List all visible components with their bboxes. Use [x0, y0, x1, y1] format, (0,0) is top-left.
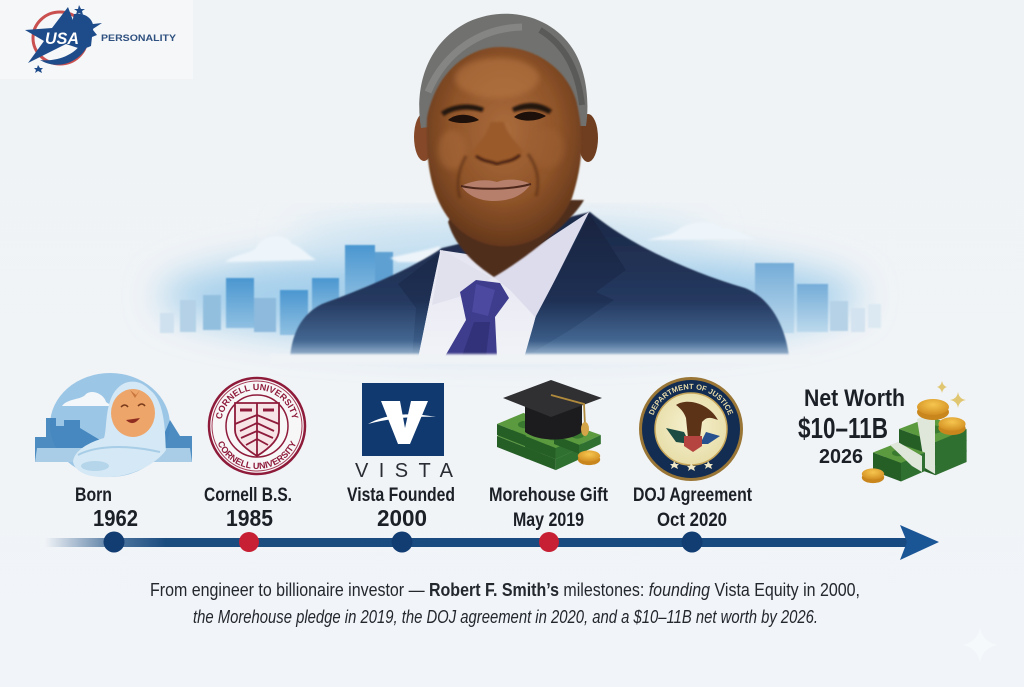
milestone: DOJ Agreement Oct 2020	[633, 485, 753, 531]
skyline right	[755, 263, 881, 333]
hair	[419, 14, 587, 128]
forehead highlight	[455, 58, 539, 98]
lapels	[524, 214, 626, 358]
milestone: Born 1962: 1962	[93, 505, 138, 531]
milestone: Net Worth $10-11B 2026: 2026	[819, 446, 863, 468]
skyline left	[160, 245, 393, 335]
icon: Department of Justice seal	[639, 377, 743, 481]
mouth	[461, 180, 531, 201]
icon: Vista logo: VISTA	[355, 460, 454, 482]
icon: money stacks and coins	[862, 381, 967, 483]
icon: Department of Justice seal: DEPARTMENT OF JUSTICE	[648, 384, 734, 416]
cheek highlights	[438, 130, 466, 170]
logo: USA Personality	[0, 0, 193, 79]
tie	[444, 280, 509, 358]
sky glow backdrop	[160, 222, 860, 344]
caption text	[150, 580, 860, 627]
milestone: DOJ Agreement Oct 2020: DOJ Agreement	[633, 485, 753, 506]
icon: Cornell University seal: CORNELL UNIVERSITY	[216, 384, 298, 419]
timeline arrow	[45, 525, 939, 560]
eyes	[448, 115, 479, 123]
milestone: Cornell B.S. 1985	[204, 485, 292, 531]
logo: USA Personality: USA	[45, 29, 79, 48]
milestone: Net Worth $10-11B 2026: Net Worth	[804, 385, 905, 412]
milestone: Cornell B.S. 1985: Cornell B.S.	[204, 485, 292, 506]
timeline markers	[104, 532, 702, 552]
milestone: Vista Founded 2000	[347, 485, 455, 531]
suit jacket	[290, 212, 789, 358]
neck shadow	[448, 200, 584, 277]
smile folds	[458, 154, 538, 198]
head	[427, 47, 582, 246]
baby face	[111, 389, 155, 437]
clouds	[225, 222, 757, 262]
ears	[414, 113, 434, 161]
eyebrows	[441, 105, 484, 116]
decorative sparkle watermark	[962, 627, 998, 663]
milestone: Morehouse Gift May 2019	[489, 485, 609, 531]
milestone: Net Worth $10-11B 2026	[798, 385, 905, 468]
milestone: DOJ Agreement Oct 2020: Oct 2020	[657, 510, 727, 531]
milestone: Net Worth $10-11B 2026: $10–11B	[798, 413, 888, 445]
sparkles	[937, 381, 966, 408]
portrait of Robert F. Smith	[290, 14, 789, 358]
icon: Vista logo	[355, 383, 454, 482]
icon: graduation cap on money	[497, 380, 602, 470]
milestone: Vista Founded 2000: Vista Founded	[347, 485, 455, 506]
icon: Cornell University seal: CORNELL UNIVERSITY	[218, 440, 296, 469]
logo: USA Personality: PERSONALITY	[101, 33, 177, 44]
icon: Cornell University seal	[208, 376, 306, 476]
milestone: Morehouse Gift May 2019: Morehouse Gift	[489, 485, 609, 506]
milestone: Born 1962: Born	[75, 485, 112, 506]
milestone: Born 1962	[75, 485, 138, 531]
icon: baby	[35, 373, 192, 477]
shirt and collar	[418, 212, 589, 358]
portrait bottom fade	[270, 354, 810, 364]
caption text: From engineer to billionaire investor — Robert F. Smith’s milestones: founding Vista Equity in 2000,	[150, 580, 860, 600]
caption text: the Morehouse pledge in 2019, the DOJ agreement in 2020, and a $10–11B net worth by 2026.	[193, 607, 818, 627]
milestone: Vista Founded 2000: 2000	[377, 505, 427, 531]
nose	[472, 122, 523, 163]
milestone: Morehouse Gift May 2019: May 2019	[513, 510, 584, 531]
milestone: Cornell B.S. 1985: 1985	[226, 505, 273, 531]
